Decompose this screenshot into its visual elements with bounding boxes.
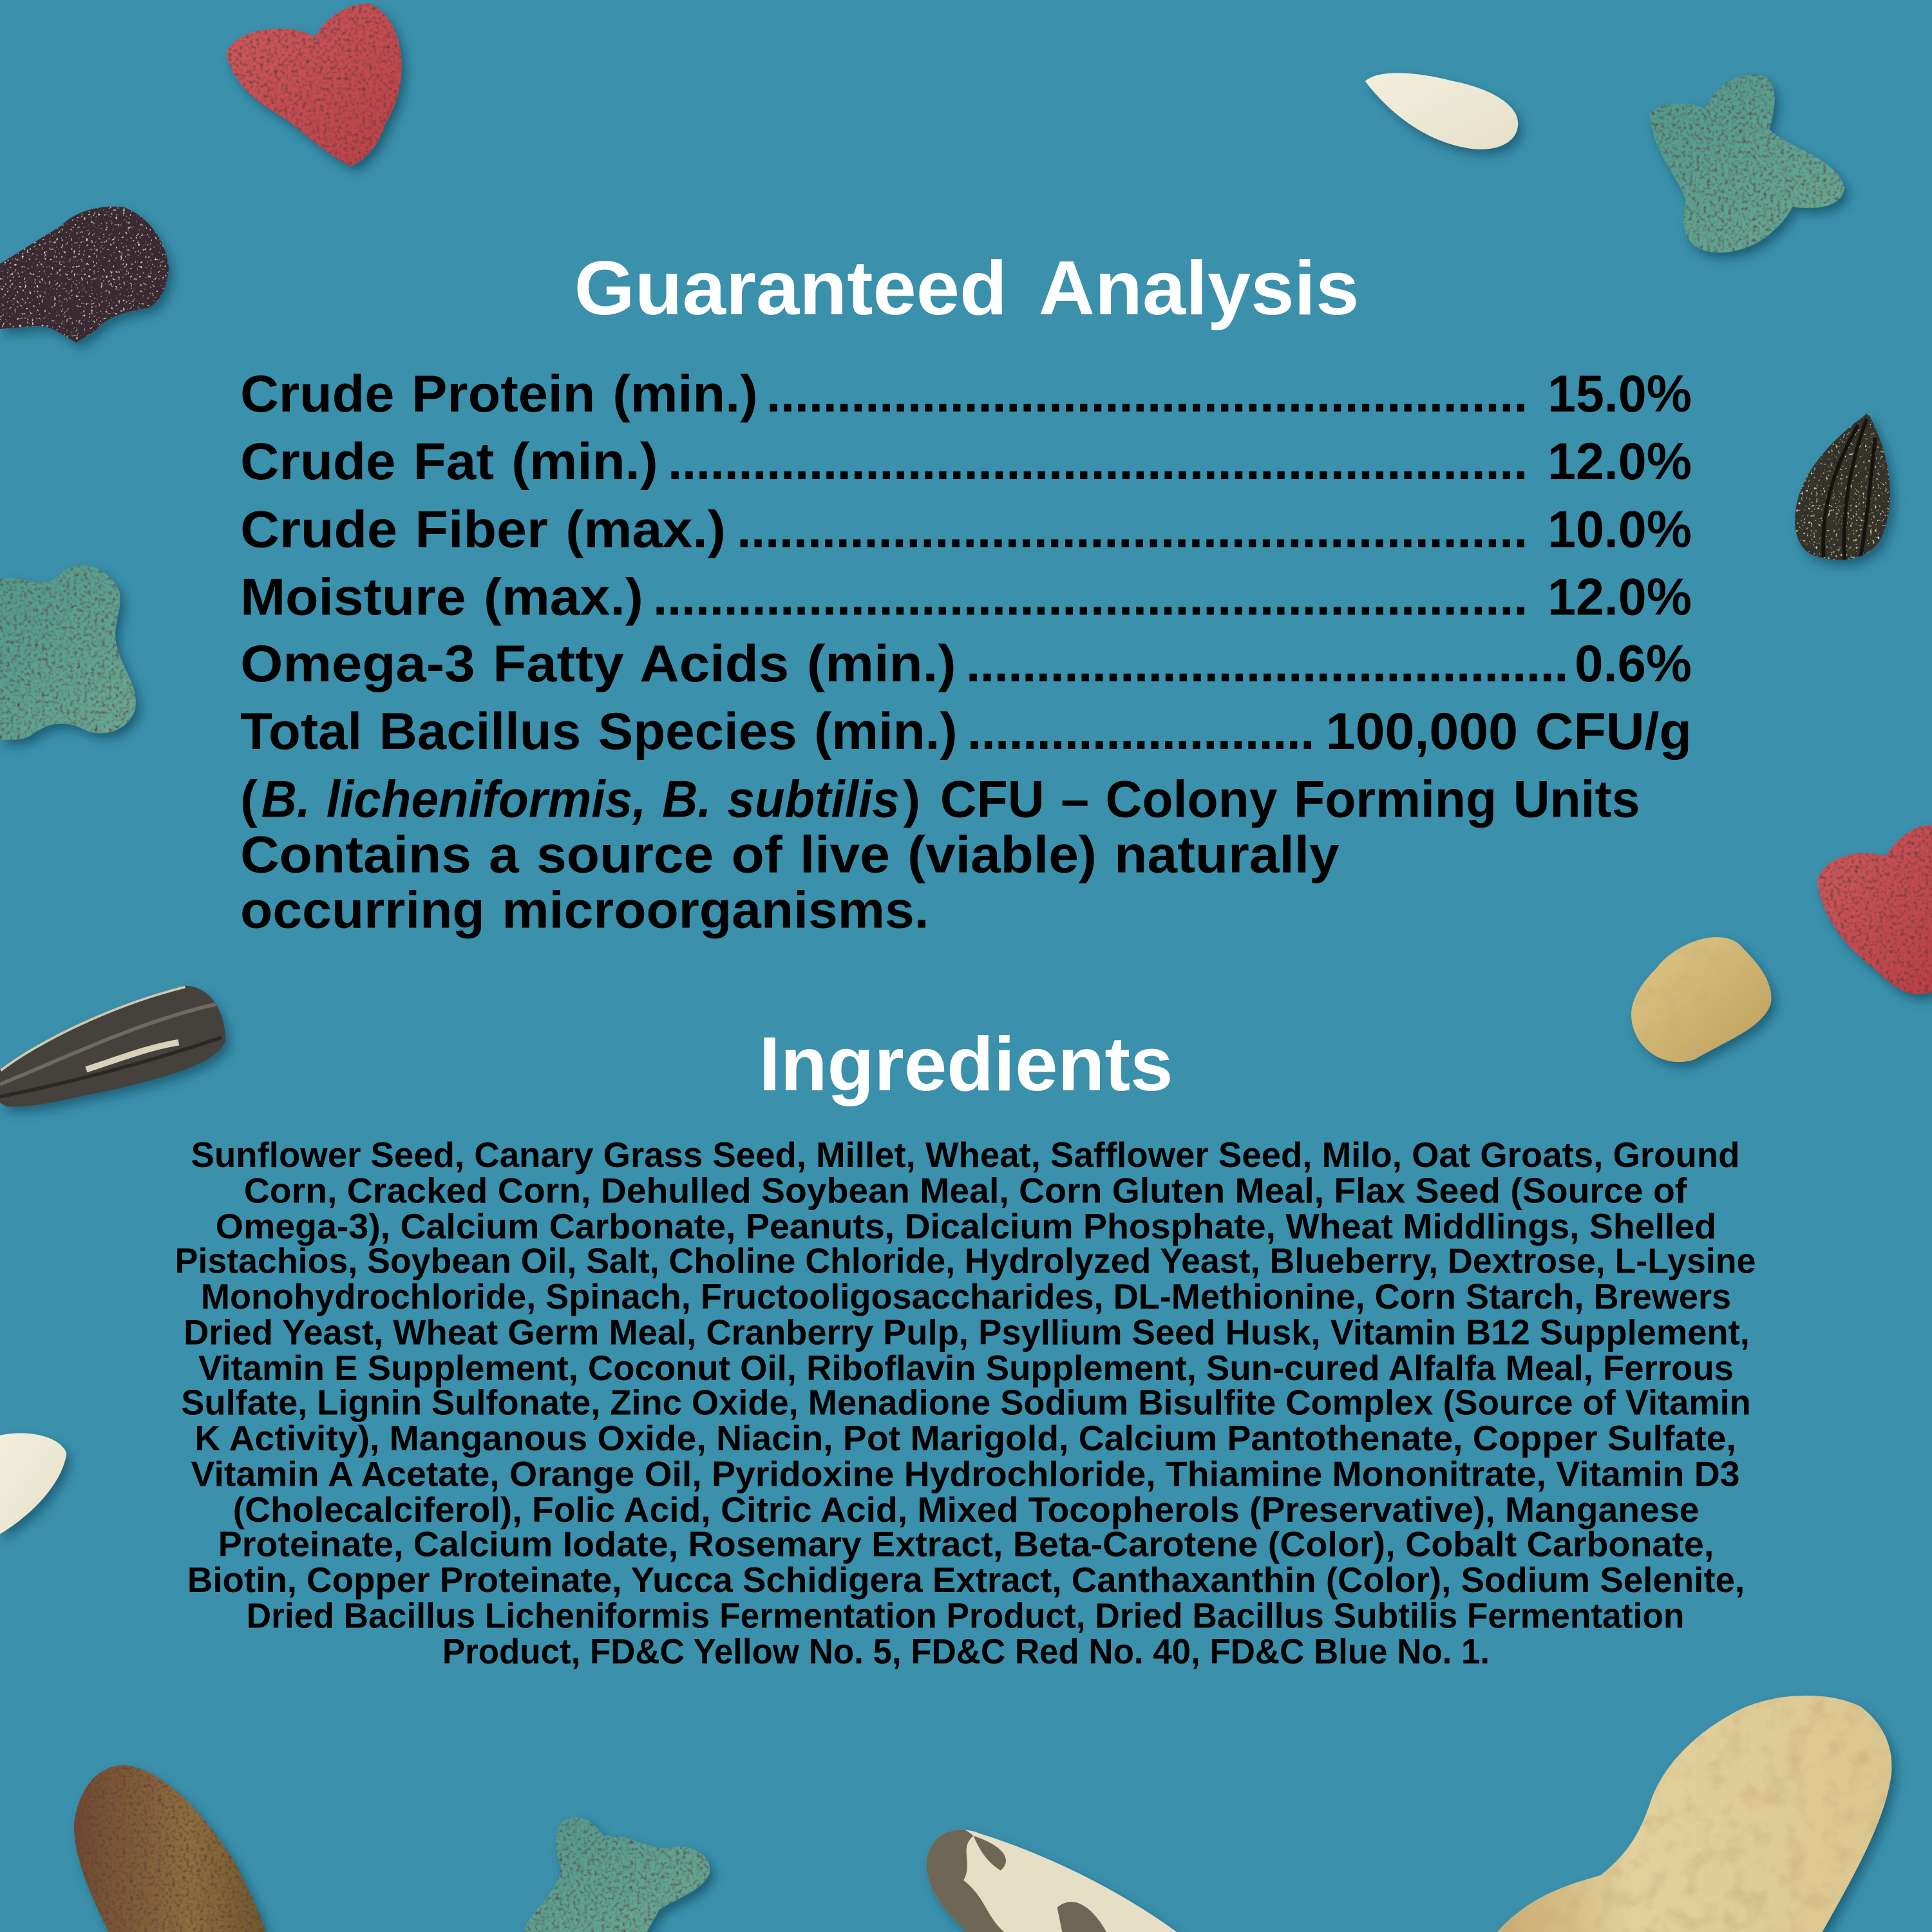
icon: red heart kibble right	[1817, 825, 1932, 994]
row: crude fiber	[240, 500, 1692, 558]
text block: ingredient list: Proteinate, Calcium Iodate, Rosemary Extract, Beta-Carotene (Color), Cobalt Carbonate,	[218, 1524, 1714, 1564]
icon: grey sunflower seed left	[0, 986, 225, 1107]
row: omega-3: 0.6%	[1575, 635, 1692, 693]
text block: bacillus note: (	[240, 770, 258, 828]
text block: ingredient list: Vitamin E Supplement, Coconut Oil, Riboflavin Supplement, Sun-cured Alfalfa Meal, Ferrous	[198, 1349, 1734, 1388]
text block: ingredient list: Product, FD&C Yellow No. 5, FD&C Red No. 40, FD&C Blue No. 1.	[442, 1632, 1490, 1671]
icon: teal kibble bottom	[524, 1817, 710, 1932]
row: crude protein: Crude Protein (min.)	[240, 365, 758, 423]
text block: ingredient list: Dried Bacillus Licheniformis Fermentation Product, Dried Bacillus Subtilis Fermentation	[247, 1596, 1684, 1635]
icon: yellow nut	[1631, 937, 1771, 1062]
text block: bacillus note: Contains a source of live (viable) naturally	[240, 826, 1340, 884]
row: omega-3	[240, 635, 1692, 693]
row: crude fiber: Crude Fiber (max.)	[240, 500, 726, 558]
text block: ingredient list: Pistachios, Soybean Oil, Salt, Choline Chloride, Hydrolyzed Yeast, Blueberry, Dextrose, L-Lysine	[175, 1241, 1756, 1280]
row: crude fiber: 10.0%	[1548, 500, 1692, 558]
text block: ingredient list	[175, 1135, 1756, 1671]
row: crude fat: .............................................................	[668, 433, 1528, 491]
text block: ingredient list: Monohydrochloride, Spinach, Fructooligosaccharides, DL-Methionine, Corn Starch, Brewers	[201, 1277, 1731, 1316]
row: moisture: ..............................................................	[653, 569, 1528, 627]
icon: teal kibble top right	[1650, 75, 1844, 252]
icon: brown seed bottom left	[74, 1765, 266, 1932]
row: crude fiber: ........................................................	[737, 500, 1528, 558]
row: crude fat	[240, 433, 1692, 491]
row: moisture: 12.0%	[1548, 569, 1692, 627]
text block: ingredient list: K Activity), Manganous Oxide, Niacin, Pot Marigold, Calcium Pantothenate, Copper Sulfate,	[194, 1419, 1736, 1458]
icon: black sunflower seed right	[1795, 413, 1890, 562]
row: total bacillus: Total Bacillus Species (min.)	[240, 703, 958, 761]
row: crude protein	[240, 365, 1692, 423]
text block: bacillus note: B. licheniformis, B. subtilis	[261, 770, 900, 828]
row: moisture: Moisture (max.)	[240, 569, 643, 627]
row: omega-3: Omega-3 Fatty Acids (min.)	[240, 635, 956, 693]
row: crude protein: ......................................................	[766, 365, 1528, 423]
icon: red heart kibble top	[227, 4, 402, 166]
icon: dark berry	[0, 207, 169, 343]
text block: ingredient list: Vitamin A Acetate, Orange Oil, Pyridoxine Hydrochloride, Thiamine Mononitrate, Vitamin D3	[191, 1454, 1740, 1493]
text block: ingredient list: Sunflower Seed, Canary Grass Seed, Millet, Wheat, Safflower Seed, Milo, Oat Groats, Ground	[191, 1135, 1740, 1175]
icon: white seed left edge	[0, 1433, 66, 1534]
text block: ingredient list: Biotin, Copper Proteinate, Yucca Schidigera Extract, Canthaxanthin (Color), Sodium Selenite,	[187, 1560, 1745, 1600]
text block: ingredient list: Corn, Cracked Corn, Dehulled Soybean Meal, Corn Gluten Meal, Flax Seed (Source of	[244, 1171, 1687, 1210]
row: crude protein: 15.0%	[1548, 365, 1692, 423]
heading: guaranteed analysis: Guaranteed Analysis	[574, 246, 1359, 331]
icon: grey and white seed bottom	[921, 1828, 1177, 1932]
panel: ingredients	[175, 1022, 1756, 1671]
heading: ingredients: Ingredients	[759, 1022, 1173, 1107]
panel: guaranteed analysis	[240, 246, 1692, 940]
row: crude fat: Crude Fat (min.)	[240, 433, 658, 491]
text block: ingredient list: (Cholecalciferol), Folic Acid, Citric Acid, Mixed Tocopherols (Preservative), Manganese	[233, 1490, 1699, 1530]
row: total bacillus: 100,000 CFU/g	[1326, 703, 1692, 761]
row: moisture	[240, 569, 1692, 627]
text block: bacillus note: )	[903, 770, 920, 828]
icon: white seed top right	[1365, 73, 1518, 149]
row: total bacillus	[240, 703, 1692, 761]
text block: ingredient list: Dried Yeast, Wheat Germ Meal, Cranberry Pulp, Psyllium Seed Husk, Vitamin B12 Supplement,	[184, 1312, 1750, 1352]
row: total bacillus: .........................	[967, 703, 1314, 761]
text block: ingredient list: Omega-3), Calcium Carbonate, Peanuts, Dicalcium Phosphate, Wheat Middlings, Shelled	[216, 1207, 1716, 1246]
text block: ingredient list: Sulfate, Lignin Sulfonate, Zinc Oxide, Menadione Sodium Bisulfite Complex (Source of Vitamin	[181, 1383, 1751, 1422]
icon: teal kibble left	[0, 565, 136, 740]
text block: bacillus note: CFU – Colony Forming Units	[940, 770, 1640, 828]
row: omega-3: ...........................................	[966, 635, 1569, 693]
row: crude fat: 12.0%	[1548, 433, 1692, 491]
icon: large peanut bottom right	[1497, 1696, 1891, 1932]
text block: bacillus note: occurring microorganisms.	[240, 882, 929, 940]
text block: bacillus note	[240, 770, 1640, 940]
